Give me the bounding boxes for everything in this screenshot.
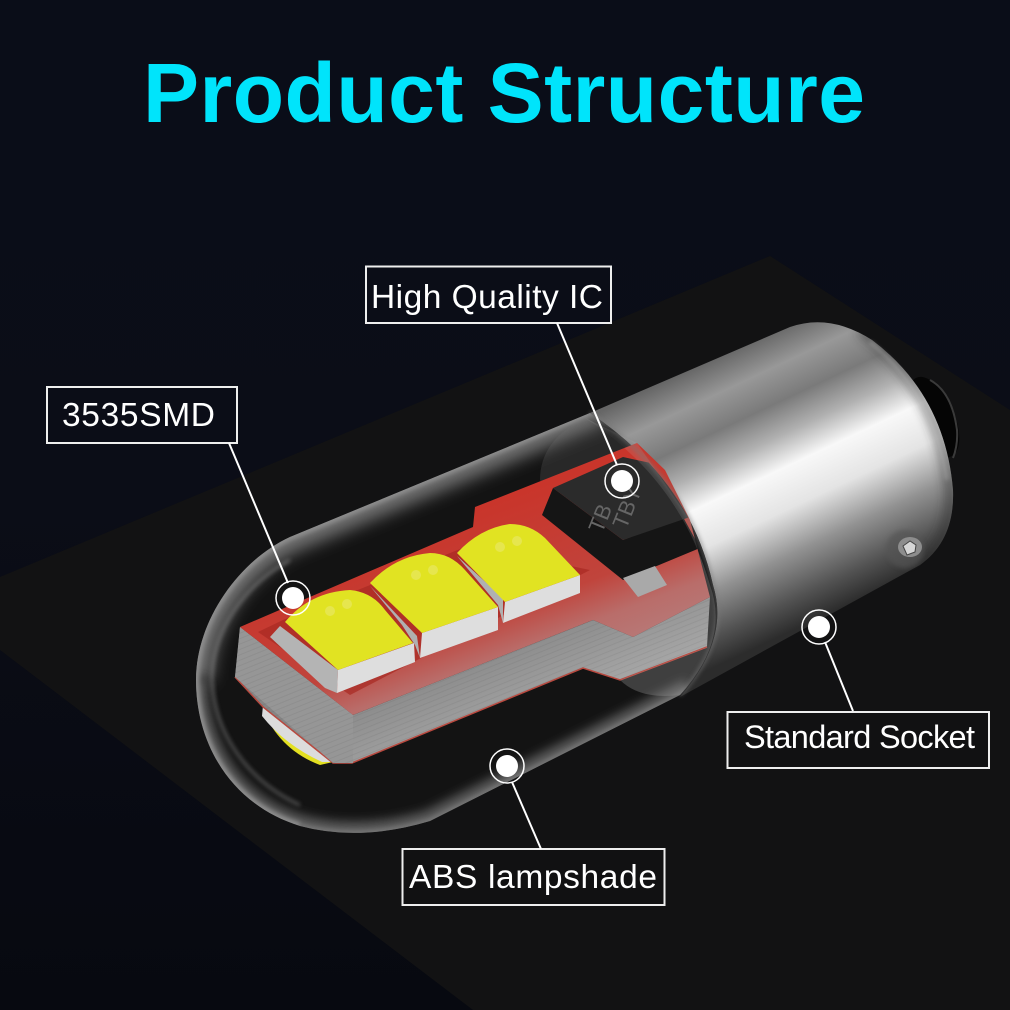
IC chip <box>542 457 700 580</box>
black surface plate <box>0 256 1010 1010</box>
callout: High Quality IC <box>366 266 639 498</box>
LED chip 1 <box>270 590 415 693</box>
metal socket <box>590 322 953 697</box>
glass haze over socket end <box>585 418 716 696</box>
PCB top face <box>240 443 710 715</box>
small SMD component <box>623 566 667 597</box>
PCB side layer texture <box>235 597 710 763</box>
callout: ABS lampshade <box>402 749 664 905</box>
contact tip <box>898 370 970 464</box>
infographic canvas <box>46 60 990 906</box>
callout: ABS lampshade: ABS lampshade <box>409 859 657 896</box>
callout: Standard Socket: Standard Socket <box>744 719 975 755</box>
callout: 3535SMD: 3535SMD <box>62 397 215 434</box>
IC chip: TBY <box>607 483 647 532</box>
glass lampshade <box>196 408 717 833</box>
PCB side red trim <box>235 647 707 763</box>
title: Product Structure <box>143 46 865 140</box>
callout: High Quality IC: High Quality IC <box>371 279 603 316</box>
socket pin <box>886 530 924 568</box>
PCB shadow under LEDs <box>258 545 590 695</box>
glass end edge <box>590 413 717 695</box>
PCB corner edge <box>235 627 353 763</box>
LED chip 2 <box>370 553 498 658</box>
LED chip 3 <box>457 524 580 623</box>
rear yellow LED <box>262 705 335 765</box>
callout: 3535SMD <box>47 387 310 615</box>
PCB side wall <box>235 597 710 763</box>
bulb illustration <box>196 322 970 833</box>
IC chip: TB <box>583 500 617 536</box>
callout: Standard Socket <box>728 610 989 768</box>
